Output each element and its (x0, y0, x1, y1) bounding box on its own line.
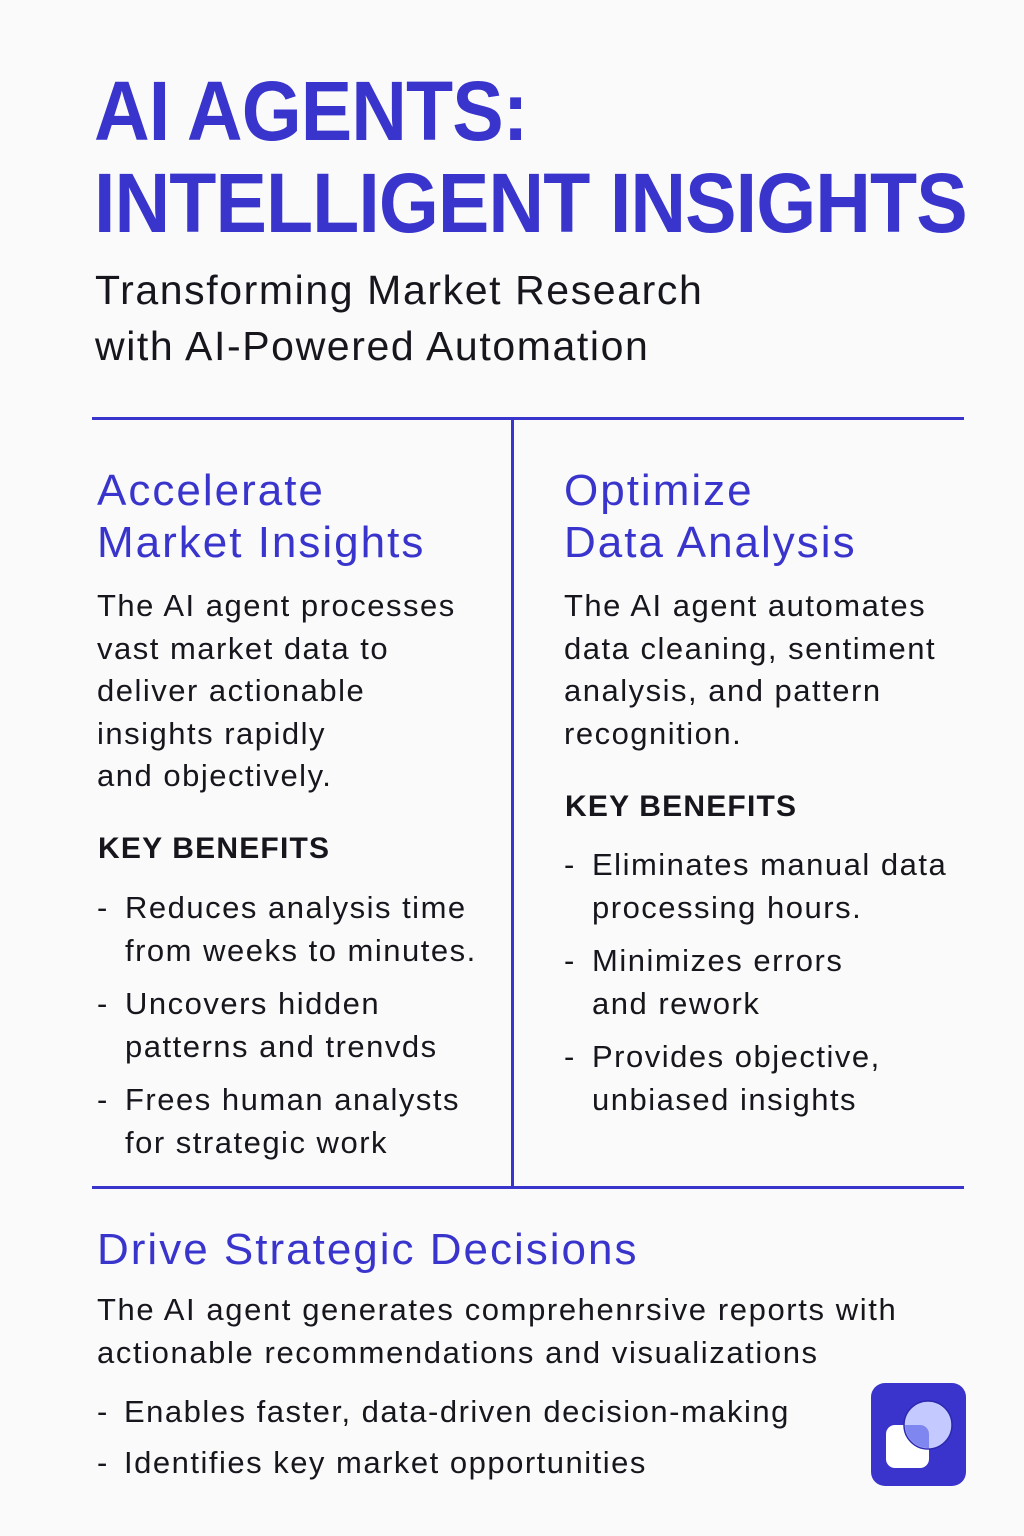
body text left (97, 588, 456, 793)
heading: drive: Drive Strategic Decisions (97, 1225, 638, 1274)
body text bottom (97, 1292, 897, 1370)
heading: accelerate (97, 466, 425, 567)
benefits list left: Uncovers hidden (125, 986, 380, 1021)
subtitle: Transforming Market Research (95, 267, 703, 313)
benefits list left: Frees human analysts (125, 1082, 460, 1117)
benefits list right: and rework (592, 986, 760, 1020)
benefits list right: Eliminates manual data (592, 847, 947, 882)
benefits list left: for strategic work (125, 1124, 388, 1160)
benefits list right: unbiased insights (592, 1082, 857, 1116)
body text right: The AI agent automates (564, 588, 926, 623)
body text bottom: actionable recommendations and visualizations (97, 1334, 819, 1370)
heading: accelerate: Market Insights (97, 518, 425, 567)
panel: drive strategic decisions (97, 1225, 897, 1480)
benefits list right: Provides objective, (592, 1039, 881, 1074)
panel: optimize data analysis (564, 466, 947, 1116)
heading: optimize (564, 466, 857, 567)
heading: optimize: Data Analysis (564, 518, 857, 567)
benefits list right: Minimizes errors (592, 943, 843, 978)
heading: accelerate: Accelerate (97, 466, 325, 515)
subtitle: with AI-Powered Automation (95, 323, 649, 369)
body text right: data cleaning, sentiment (564, 630, 936, 666)
body text left: and objectively. (97, 758, 332, 793)
key benefits left: KEY BENEFITS (98, 832, 330, 865)
benefits list right: processing hours. (592, 890, 862, 924)
title: INTELLIGENT INSIGHTS (94, 156, 967, 250)
benefits list left: patterns and trenvds (125, 1028, 438, 1064)
body text left: vast market data to (97, 630, 389, 666)
body text right: recognition. (564, 716, 742, 750)
title: AI AGENTS: (94, 64, 528, 158)
benefits list bottom: Enables faster, data-driven decision-making (124, 1394, 790, 1429)
heading: optimize: Optimize (564, 466, 754, 515)
key benefits right: KEY BENEFITS (565, 790, 797, 823)
body text right: analysis, and pattern (564, 673, 882, 708)
panel: accelerate market insights (97, 466, 477, 1160)
benefits list bottom (98, 1394, 790, 1480)
body text left: insights rapidly (97, 716, 326, 750)
icon: overlapping shapes (871, 1383, 966, 1486)
benefits list left: Reduces analysis time (125, 890, 467, 925)
benefits list left (98, 890, 477, 1160)
benefits list bottom: Identifies key market opportunities (124, 1444, 647, 1480)
title (94, 64, 967, 250)
benefits list right (565, 847, 947, 1116)
divider lines (92, 417, 964, 420)
subtitle (95, 267, 703, 369)
benefits list left: from weeks to minutes. (125, 932, 477, 968)
body text right (564, 588, 936, 750)
body text left: deliver actionable (97, 673, 365, 708)
body text left: The AI agent processes (97, 588, 456, 623)
body text bottom: The AI agent generates comprehenrsive reports with (97, 1292, 897, 1327)
